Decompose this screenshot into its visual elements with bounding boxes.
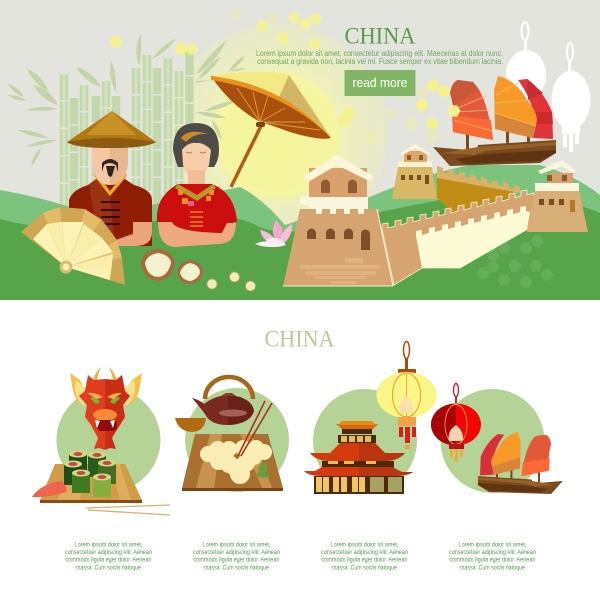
backing circle [185, 388, 289, 492]
read more button [344, 70, 416, 96]
wooden board [182, 434, 283, 491]
bamboo leaves [8, 33, 246, 166]
garnish leaf [256, 462, 270, 478]
banner background [0, 0, 600, 300]
caption 3 [321, 542, 408, 572]
main wall [382, 190, 534, 285]
face and neck [182, 143, 211, 178]
red dress [157, 184, 237, 234]
back green hills [0, 165, 600, 300]
heading: banner title: CHINA [344, 24, 416, 48]
woman [157, 123, 237, 247]
panel: teapot and dumplings [175, 377, 289, 492]
caption 4: consectetuer adipiscing elit. Aenean [449, 549, 536, 556]
dragon mask [70, 367, 142, 450]
banner paragraph [256, 49, 503, 66]
teapot [192, 377, 254, 425]
backing circle [313, 389, 417, 493]
panel: red lantern and junk [431, 384, 563, 494]
sun glow [166, 24, 388, 246]
tea bowl [175, 418, 206, 432]
honeycomb field pattern [476, 235, 554, 288]
read more button: read more [352, 76, 408, 90]
caption 1 [65, 542, 152, 572]
white lanterns silhouette [506, 22, 590, 152]
caption 3: consectetuer adipiscing elit. Aenean [321, 549, 408, 556]
bamboo board [40, 464, 142, 503]
caption 1: consectetuer adipiscing elit. Aenean [65, 549, 152, 556]
chopsticks [86, 505, 170, 515]
backing circle [440, 389, 544, 493]
folding fan [21, 207, 125, 285]
salmon slice [32, 481, 66, 497]
beard and brows [102, 159, 118, 177]
arm [116, 222, 152, 246]
caption 1: massa. Cum sociis natoque [76, 564, 141, 572]
collar [94, 172, 127, 196]
heading: section title: CHINA [264, 326, 335, 352]
shell dumplings [141, 249, 203, 284]
caption 3: commodo ligula eget dolor. Aenean [322, 556, 408, 564]
panel: dragon and sushi [32, 367, 170, 515]
pagoda [304, 421, 413, 494]
lotus flower [255, 220, 292, 247]
small junk ship [478, 432, 563, 494]
canopy underside [211, 76, 331, 139]
hull [433, 140, 556, 166]
jacket [69, 175, 152, 246]
front green field [0, 197, 600, 300]
caption 3: Lorem ipsum dolor sit amet, [330, 542, 399, 548]
man in hat [67, 111, 156, 246]
caption 2: commodo ligula eget dolor. Aenean [194, 556, 280, 564]
pearls [207, 272, 256, 291]
red chopsticks [238, 401, 272, 456]
yellow lantern [376, 342, 436, 449]
caption 4: commodo ligula eget dolor. Aenean [450, 556, 536, 564]
caption 4: massa. Cum sociis natoque [460, 564, 525, 572]
caption 1: commodo ligula eget dolor. Aenean [66, 556, 152, 564]
sushi rolls [64, 450, 116, 497]
masts [466, 125, 530, 150]
rear red sail [518, 79, 553, 139]
arms [158, 222, 236, 247]
middle orange sail [494, 76, 537, 138]
gold fasteners [190, 212, 203, 226]
far wall [437, 166, 520, 212]
red lantern [431, 384, 481, 462]
right tower [527, 160, 588, 232]
paper umbrella [211, 72, 331, 187]
front red sail [450, 80, 493, 140]
hair [173, 123, 219, 167]
caption 3: massa. Cum sociis natoque [332, 564, 397, 572]
bamboo grove [64, 49, 190, 215]
panel: pagoda and lantern [304, 342, 436, 494]
far tower [392, 144, 437, 199]
banner paragraph: consequat a gravida non, lacinia vel mi. Fusce semper ex vitae bibendum lacinia. [257, 57, 503, 66]
banner paragraph: Lorem ipsum dolor sit amet, consectetur adipiscing elit. Maecenas at dolor nunc, [256, 49, 503, 58]
knot buttons [101, 202, 120, 224]
caption 1: Lorem ipsum dolor sit amet, [74, 542, 143, 548]
yellow bokeh hexagons [110, 9, 460, 143]
caption 4 [449, 542, 536, 572]
junk ship [433, 76, 556, 166]
conical hat [67, 111, 156, 148]
umbrella handle [231, 124, 262, 187]
caption 2: massa. Cum sociis natoque [204, 564, 269, 572]
gold collar [175, 184, 216, 201]
canopy top [211, 72, 331, 138]
caption 4: Lorem ipsum dolor sit amet, [458, 542, 527, 548]
great wall main tower [283, 155, 393, 286]
face [92, 140, 128, 185]
caption 2: Lorem ipsum dolor sit amet, [202, 542, 271, 548]
backing circle [56, 388, 160, 492]
dumplings [200, 440, 272, 484]
caption 2: consectetuer adipiscing elit. Aenean [193, 549, 280, 556]
caption 2 [193, 542, 280, 572]
